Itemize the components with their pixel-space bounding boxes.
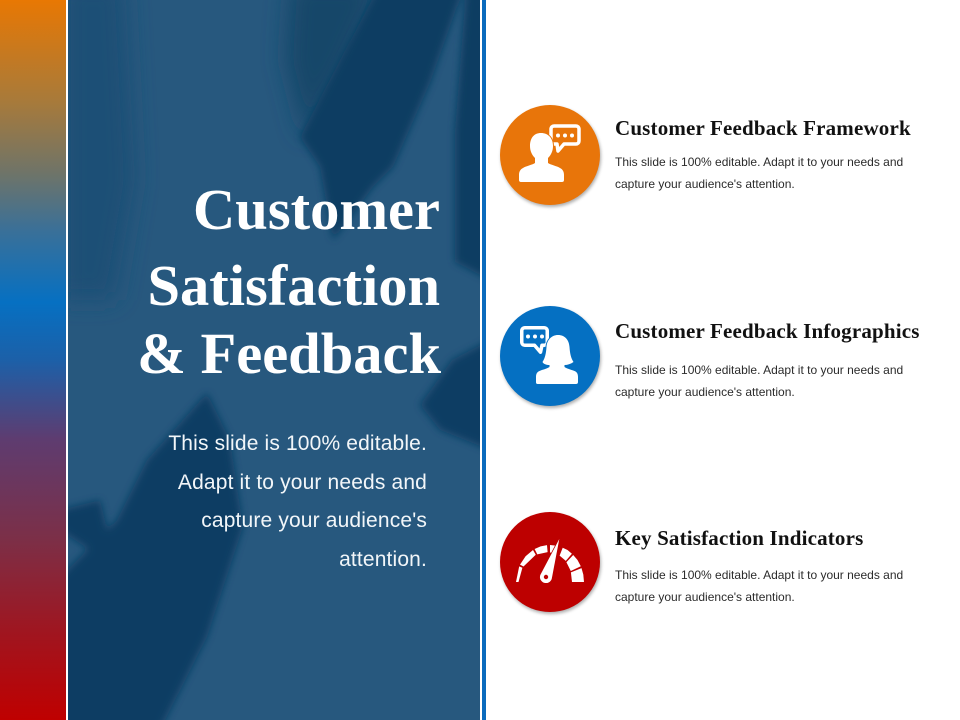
- icon circle: customer feedback infographics: [500, 306, 600, 406]
- icon: speedometer gauge: [516, 539, 584, 583]
- title: [137, 177, 441, 386]
- icon: man with speech bubble: [519, 126, 579, 182]
- body: infographics: capture your audience's attention.: [615, 385, 795, 399]
- subtitle text: capture your audience's: [201, 509, 427, 532]
- panel: photo background: [68, 0, 480, 720]
- icon circle: customer feedback framework: [500, 105, 600, 205]
- title: Satisfaction: [148, 253, 440, 318]
- icon: woman with speech bubble: [522, 328, 578, 384]
- title: Customer: [193, 177, 440, 242]
- subtitle text: attention.: [339, 548, 427, 570]
- title: & Feedback: [137, 321, 441, 386]
- gradient strip: [0, 0, 66, 720]
- heading: infographics: Customer Feedback Infographics: [615, 319, 920, 343]
- heading: indicators: Key Satisfaction Indicators: [615, 526, 863, 550]
- heading: framework: Customer Feedback Framework: [615, 116, 911, 140]
- body: framework: This slide is 100% editable. Adapt it to your needs and: [615, 155, 903, 169]
- body: indicators: This slide is 100% editable. Adapt it to your needs and: [615, 568, 903, 582]
- body: indicators: capture your audience's attention.: [615, 590, 795, 604]
- subtitle text: [168, 432, 427, 570]
- right blue rule: [482, 0, 486, 720]
- icon circle: key satisfaction indicators: [500, 512, 600, 612]
- body: infographics: [615, 363, 903, 399]
- body: framework: capture your audience's attention.: [615, 177, 795, 191]
- subtitle text: Adapt it to your needs and: [178, 470, 427, 494]
- body: infographics: This slide is 100% editable. Adapt it to your needs and: [615, 363, 903, 377]
- body: framework: [615, 155, 903, 191]
- subtitle text: This slide is 100% editable.: [168, 432, 427, 455]
- body: indicators: [615, 568, 903, 604]
